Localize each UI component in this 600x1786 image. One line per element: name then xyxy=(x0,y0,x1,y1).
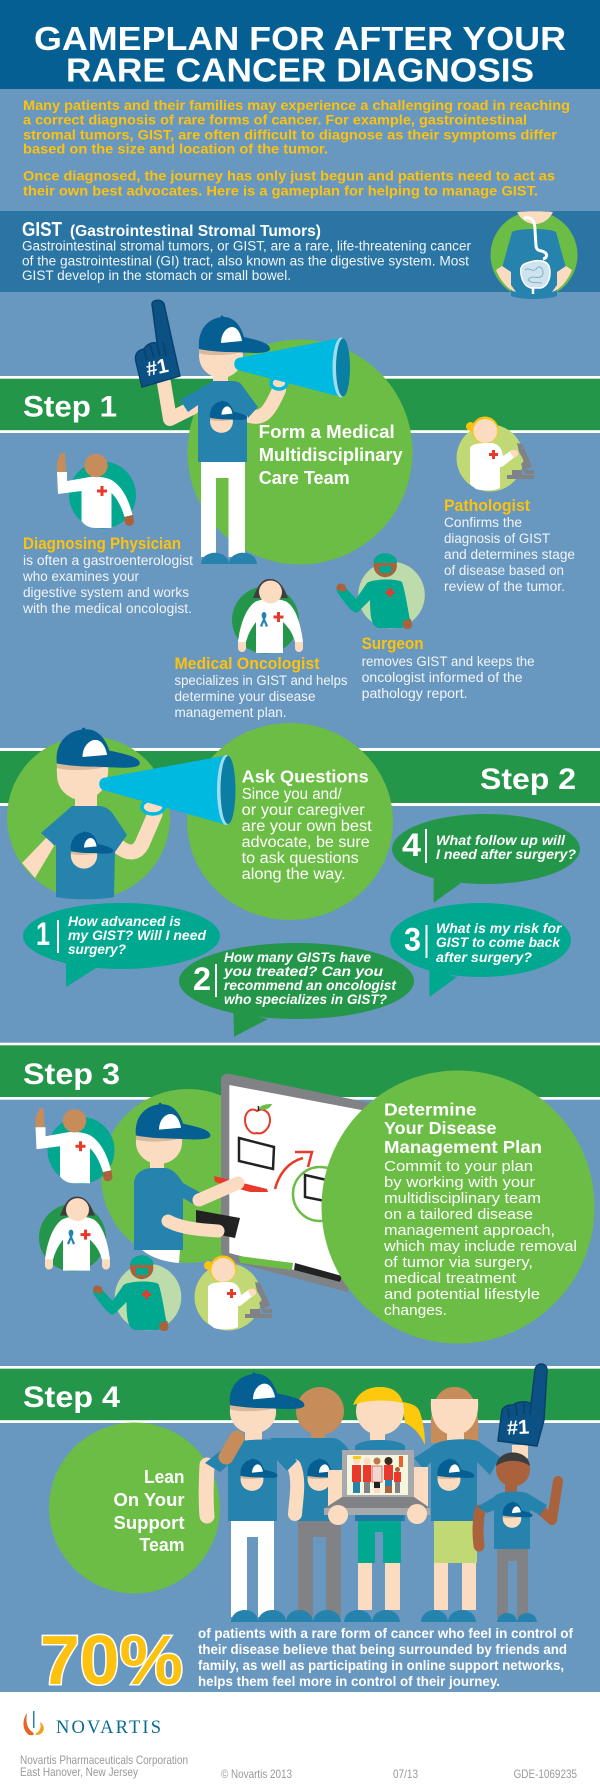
step 3 circle text: changes. xyxy=(384,1302,447,1319)
step 1 band xyxy=(0,376,600,433)
intro text: based on the size and location of the tumor. xyxy=(23,140,328,156)
header band with title: RARE CANCER DIAGNOSIS xyxy=(66,52,534,90)
text: surgeon: removes GIST and keeps the xyxy=(362,654,535,669)
panel: form a medical multidisciplinary care team circle xyxy=(188,340,412,564)
step 3 circle text: multidisciplinary team xyxy=(384,1190,541,1207)
mini cap logo on shirt xyxy=(210,400,247,433)
text: diagnosing physician: with the medical oncologist. xyxy=(22,601,192,616)
circle behind step 3 figure xyxy=(101,1089,275,1263)
panel: lean on your support team circle: Lean xyxy=(144,1466,184,1487)
speech bubble 1: How advanced is xyxy=(68,914,181,929)
speech bubble 4: I need after surgery? xyxy=(436,847,576,862)
step 1 circle text: Form a Medical xyxy=(259,421,395,442)
whiteboard xyxy=(221,1074,380,1292)
text: pathologist: review of the tumor. xyxy=(444,579,565,594)
footer: company address: East Hanover, New Jersey xyxy=(20,1765,138,1779)
ask questions text: are your own best xyxy=(242,818,372,835)
speech bubble 2 xyxy=(179,943,414,1037)
panel: lean on your support team circle: On Your xyxy=(114,1489,184,1510)
footer: company address: Novartis Pharmaceuticals Corporation xyxy=(20,1753,188,1767)
foam finger xyxy=(498,1364,547,1446)
speech bubble 1: surgery? xyxy=(68,942,126,957)
step 4 band xyxy=(0,1366,600,1423)
icon: pathologist (step 3) xyxy=(194,1256,272,1330)
step 3 band xyxy=(0,1043,600,1100)
cap xyxy=(57,728,140,794)
speech bubble 3: 3 xyxy=(404,922,421,958)
shirt xyxy=(134,1168,201,1250)
neck xyxy=(75,792,97,808)
speech bubble 3: after surgery? xyxy=(436,950,532,965)
step 1 circle text: Care Team xyxy=(259,467,350,488)
person 2 with brown skin xyxy=(270,1387,349,1622)
speech bubble 1 xyxy=(23,903,220,987)
footer: Novartis logo xyxy=(23,1711,161,1738)
arms xyxy=(168,1183,238,1231)
text: diagnosing physician: Diagnosing Physician xyxy=(23,535,181,553)
head and cap xyxy=(199,316,270,378)
text: diagnosing physician: digestive system and works xyxy=(23,585,189,600)
panel: GIST definition: of the gastrointestinal (GI) tract, also known as the digestive system. Most xyxy=(22,253,469,268)
text: diagnosing physician: is often a gastroenterologist xyxy=(23,553,193,568)
panel: GIST definition: Gastrointestinal stromal tumors, or GIST, are a rare, life-threatening cancer xyxy=(22,239,471,254)
foam finger: #1 xyxy=(144,355,170,381)
stat description xyxy=(198,1625,573,1689)
mini team photo xyxy=(352,1456,403,1493)
neck xyxy=(150,1155,164,1169)
green marker xyxy=(239,1256,293,1270)
text: pathologist: of disease based on xyxy=(444,563,564,578)
figure: patient with megaphone and foam finger xyxy=(135,300,350,564)
stat description: their disease believe that being surrounded by friends and xyxy=(198,1641,567,1657)
red marker xyxy=(214,1176,268,1192)
board green circle xyxy=(293,1167,347,1221)
head and cap xyxy=(136,1103,210,1164)
icon: pathologist xyxy=(456,416,534,492)
footer: document code: GDE-1069235 xyxy=(514,1767,577,1781)
step 3 circle text: medical treatment xyxy=(384,1270,517,1287)
speech bubble 4: What follow up will xyxy=(436,833,565,848)
step 3 circle text: and potential lifestyle xyxy=(384,1286,540,1303)
panel: GIST definition: GIST xyxy=(22,219,62,241)
step 3 circle text: which may include removal xyxy=(383,1238,577,1255)
icon: physician (step 3) xyxy=(36,1108,114,1184)
step 1 heading: Step 1 xyxy=(23,391,117,424)
icon: digestive system xyxy=(490,211,578,299)
foam finger: #1 xyxy=(506,1416,530,1440)
text: medical oncologist: specializes in GIST and helps xyxy=(174,673,348,688)
ask questions text: along the way. xyxy=(242,866,346,883)
text: surgeon: oncologist informed of the xyxy=(362,670,523,685)
left arm xyxy=(22,836,54,878)
neck xyxy=(213,370,228,383)
text: surgeon: pathology report. xyxy=(362,686,468,701)
header band with title xyxy=(0,0,600,90)
speech bubble 2: who specializes in GIST? xyxy=(224,992,387,1007)
ask questions text: or your caregiver xyxy=(242,802,365,819)
text: pathologist: Confirms the xyxy=(444,515,522,530)
ask questions text: advocate, be sure xyxy=(242,834,370,851)
panel: ask questions circle xyxy=(187,723,393,920)
person 3 blonde xyxy=(344,1387,425,1622)
speech bubble 4 xyxy=(392,814,580,903)
figure arms xyxy=(164,383,279,419)
ask questions text xyxy=(242,767,372,883)
text: diagnosing physician xyxy=(22,535,193,616)
legs xyxy=(201,462,245,557)
panel: GIST definition: (Gastrointestinal Stromal Tumors) xyxy=(70,223,321,240)
shoes xyxy=(201,553,257,564)
step 3 circle text: Management Plan xyxy=(384,1137,542,1157)
text: medical oncologist xyxy=(174,655,348,720)
stat: 70%: 70% xyxy=(40,1621,183,1699)
shirt xyxy=(41,806,127,899)
intro text: Many patients and their families may experience a challenging road in reaching xyxy=(23,97,570,113)
text: diagnosing physician: who examines your xyxy=(22,569,139,584)
footer: date: 07/13 xyxy=(393,1767,418,1781)
speech bubble 4: 4 xyxy=(402,827,421,863)
panel: GIST definition xyxy=(0,211,600,292)
laptop xyxy=(324,1450,430,1525)
speech bubble 2: you treated? Can you xyxy=(223,964,384,979)
text: medical oncologist: Medical Oncologist xyxy=(174,655,320,673)
ask questions text: to ask questions xyxy=(242,850,359,867)
speech bubble 1: 1 xyxy=(36,916,50,952)
head xyxy=(57,750,107,800)
ask questions text: Ask Questions xyxy=(242,767,369,787)
black marker xyxy=(294,1263,342,1282)
intro text: Once diagnosed, the journey has only just begun and patients need to act as xyxy=(23,167,555,183)
step 3 circle text: Determine xyxy=(384,1100,477,1120)
panel: lean on your support team circle: Support xyxy=(114,1512,184,1533)
step 3 circle text: Commit to your plan xyxy=(384,1158,533,1175)
panel: determine your disease management plan circle xyxy=(322,1070,594,1344)
panel: GIST definition: GIST develop in the stomach or small bowel. xyxy=(22,268,291,283)
step 3 circle text: on a tailored disease xyxy=(384,1206,533,1223)
shirt xyxy=(180,381,258,462)
stat description: helps them feel more in control of their journey. xyxy=(198,1673,500,1689)
legs xyxy=(142,1250,180,1263)
step 1 circle text: Multidisciplinary xyxy=(259,444,403,465)
icon: oncologist (step 3) xyxy=(39,1197,110,1271)
intro text: a correct diagnosis of rare forms of cancer. For example, gastrointestinal xyxy=(23,112,527,128)
person 4 long hair xyxy=(414,1387,528,1622)
step 1 circle text xyxy=(259,421,403,488)
intro text xyxy=(23,97,570,198)
speech bubble 2: recommend an oncologist xyxy=(224,978,397,993)
figure: support team group xyxy=(205,1364,558,1622)
text: surgeon: Surgeon xyxy=(362,635,424,653)
icon: apple xyxy=(245,1104,272,1133)
speech bubble 3: GIST to come back xyxy=(436,935,562,950)
intro text: their own best advocates. Here is a gameplan for helping to manage GIST. xyxy=(23,182,538,198)
speech bubble 2: 2 xyxy=(193,961,211,997)
megaphone xyxy=(234,338,350,398)
text: pathologist xyxy=(444,497,575,594)
step 3 heading: Step 3 xyxy=(23,1058,120,1091)
speech bubble 3: What is my risk for xyxy=(436,921,562,936)
step 3 circle text: Your Disease xyxy=(384,1118,497,1138)
speech bubble 3 xyxy=(390,903,571,997)
speech bubble 1: my GIST? Will I need xyxy=(68,928,207,943)
footer: Novartis logo: NOVARTIS xyxy=(56,1718,161,1738)
panel: lean on your support team circle: Team xyxy=(140,1534,184,1555)
icon: medical oncologist xyxy=(232,579,303,654)
step 2 heading: Step 2 xyxy=(480,763,576,796)
child with foam finger xyxy=(477,1452,558,1622)
clipboard xyxy=(196,1210,240,1238)
stat description: family, as well as participating in online support networks, xyxy=(198,1657,564,1673)
text: pathologist: Pathologist xyxy=(444,497,530,515)
person 1 with cap xyxy=(205,1372,304,1622)
step 3 circle text: of tumor via surgery, xyxy=(384,1254,533,1271)
megaphone xyxy=(99,755,236,825)
board rectangle xyxy=(239,1138,274,1169)
mini cap logo xyxy=(71,831,113,869)
footer: company address xyxy=(20,1753,188,1779)
right arm xyxy=(118,814,155,852)
figure: patient at whiteboard xyxy=(134,1103,268,1263)
header band with title: GAMEPLAN FOR AFTER YOUR xyxy=(34,21,566,58)
text: pathologist: diagnosis of GIST xyxy=(444,531,550,546)
step 3 circle text: management approach, xyxy=(384,1222,555,1239)
text: surgeon xyxy=(362,635,535,701)
speech bubble 2: How many GISTs have xyxy=(224,950,371,965)
text: medical oncologist: management plan. xyxy=(174,705,286,720)
step 3 circle text: by working with your xyxy=(384,1174,535,1191)
stat description: of patients with a rare form of cancer who feel in control of xyxy=(198,1625,573,1641)
icon: diagnosing physician xyxy=(57,453,136,528)
text: pathologist: and determines stage xyxy=(444,547,575,562)
step 3 circle text xyxy=(383,1100,577,1319)
board red arrow xyxy=(275,1152,312,1189)
ask questions text: Since you and/ xyxy=(242,786,342,803)
text: medical oncologist: determine your disease xyxy=(174,689,316,704)
panel: lean on your support team circle xyxy=(49,1422,220,1594)
circle behind step 2 figure xyxy=(7,736,170,899)
icon: surgeon xyxy=(336,553,425,629)
figure: patient with megaphone xyxy=(22,728,236,899)
foam finger xyxy=(135,300,180,387)
footer: copyright: © Novartis 2013 xyxy=(221,1767,292,1781)
step 2 band xyxy=(0,748,600,806)
intro text: stromal tumors, GIST, are often difficult to diagnose as their symptoms differ xyxy=(23,126,558,142)
step 4 heading: Step 4 xyxy=(23,1381,120,1414)
icon: surgeon (step 3) xyxy=(93,1255,181,1331)
board second rectangle xyxy=(305,1175,340,1204)
